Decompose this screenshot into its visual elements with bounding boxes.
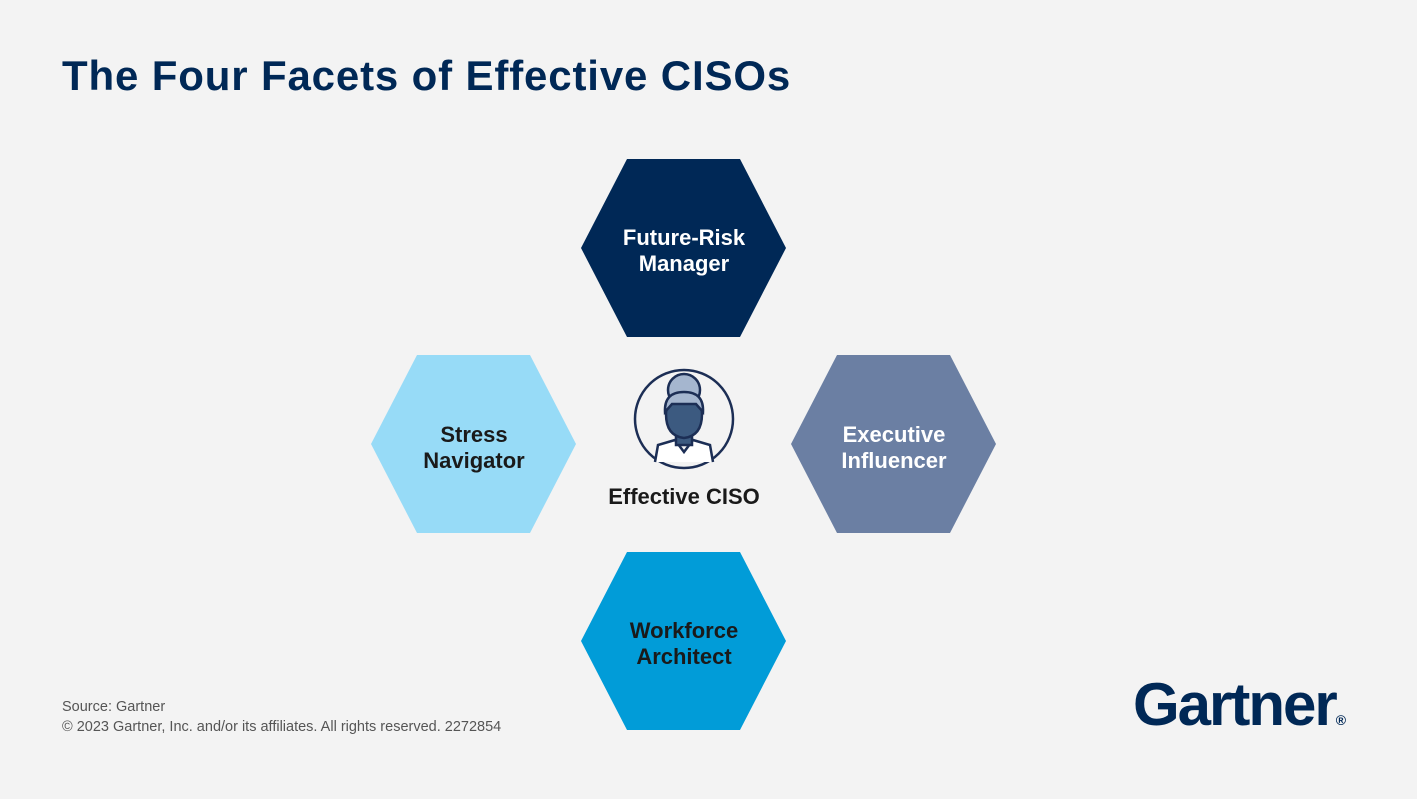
hexagon: workforce architect: Architect	[636, 644, 732, 669]
title: The Four Facets of Effective CISOs	[62, 52, 791, 99]
hexagon: stress navigator: Stress	[440, 422, 508, 447]
hexagon: executive influencer	[791, 355, 996, 533]
source note: © 2023 Gartner, Inc. and/or its affiliates. All rights reserved. 2272854	[62, 719, 501, 735]
hexagon: workforce architect	[581, 552, 786, 730]
icon: CISO person	[635, 370, 733, 468]
label: effective CISO: Effective CISO	[608, 484, 760, 509]
source note: Source: Gartner	[62, 699, 165, 715]
hexagon: future-risk manager	[581, 159, 786, 337]
hexagon: stress navigator: Navigator	[423, 448, 525, 473]
hexagon: future-risk manager: Manager	[639, 251, 730, 276]
logo: Gartner: Gartner®	[1133, 671, 1346, 738]
hexagon: future-risk manager: Future-Risk	[623, 225, 746, 250]
hexagon: workforce architect: Workforce	[630, 618, 738, 643]
hexagon: executive influencer: Influencer	[841, 448, 947, 473]
hexagon: stress navigator	[371, 355, 576, 533]
hexagon: executive influencer: Executive	[843, 422, 945, 447]
source note	[62, 699, 501, 735]
